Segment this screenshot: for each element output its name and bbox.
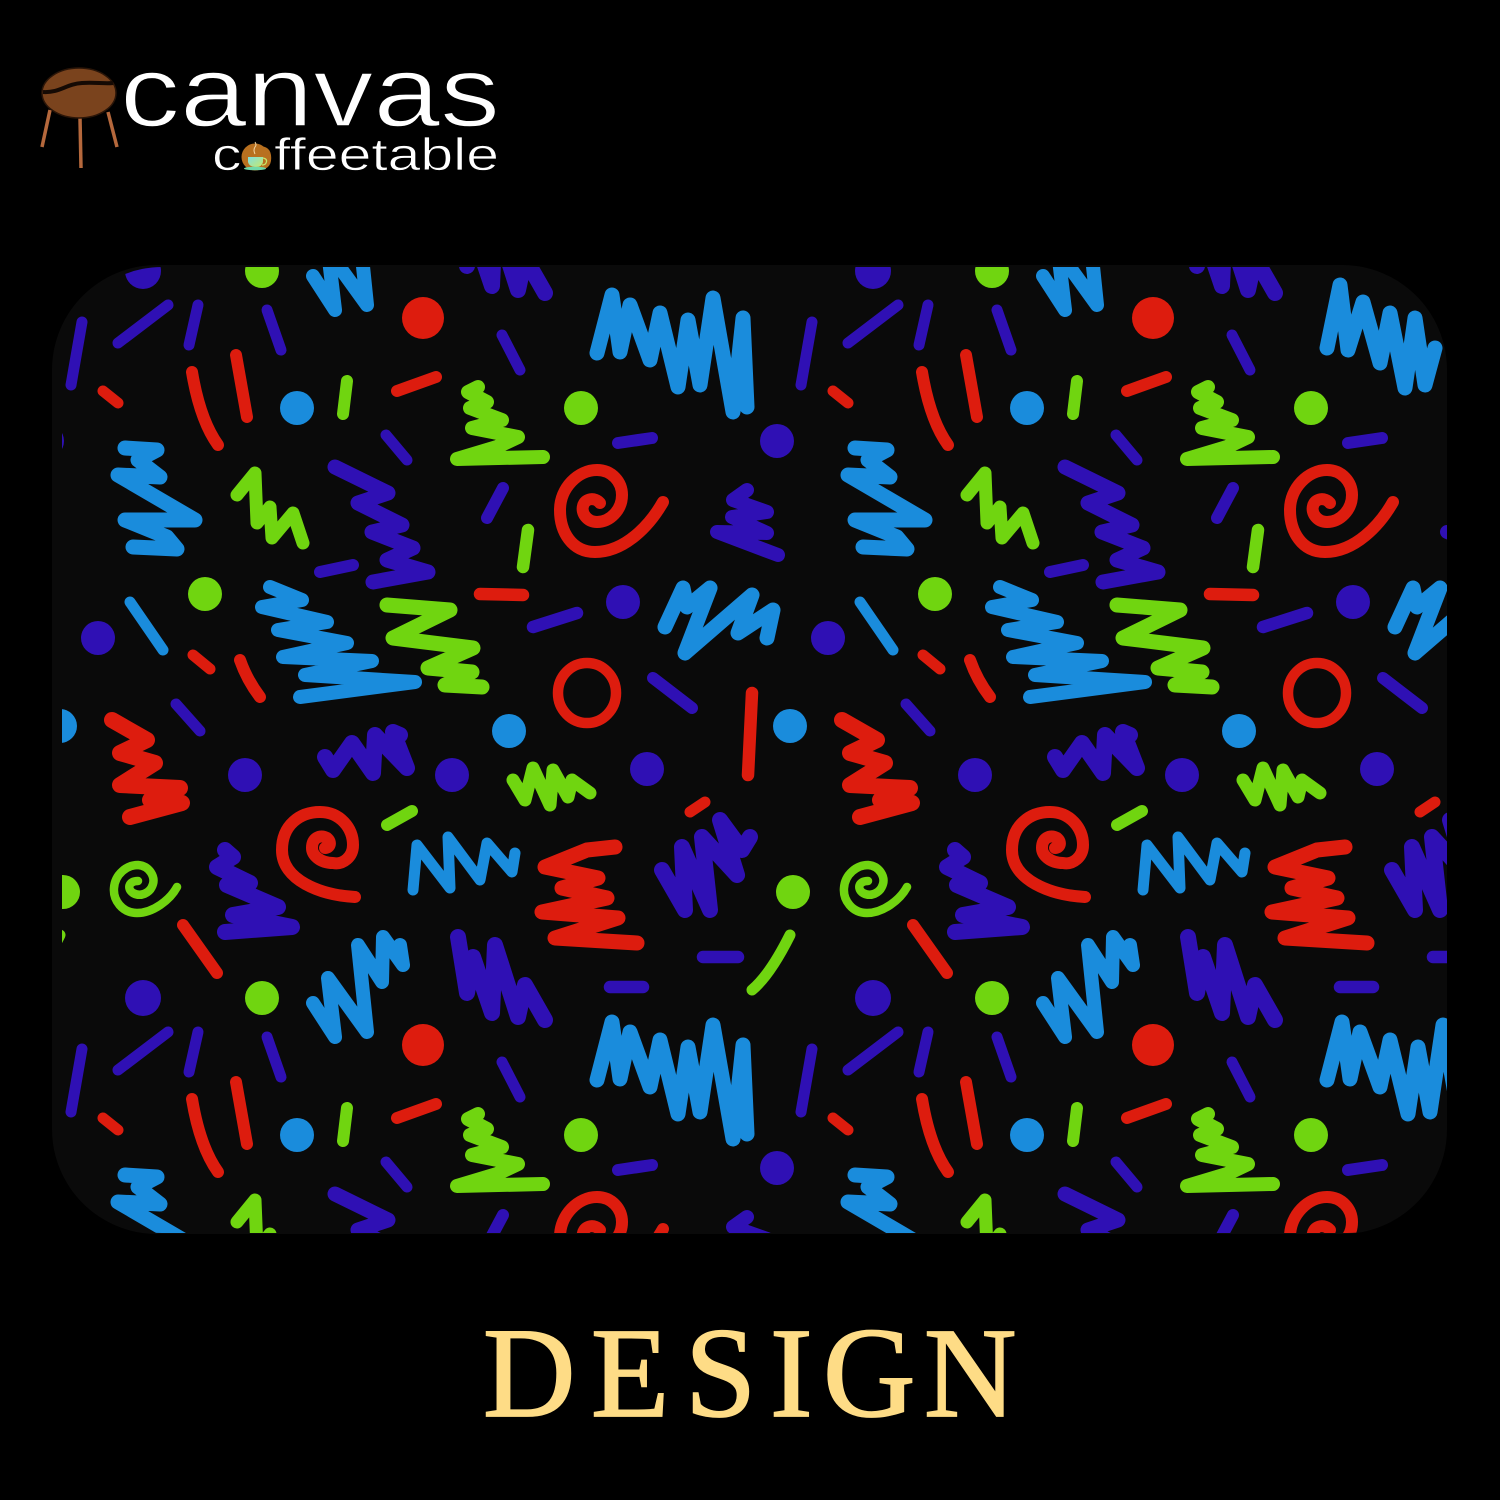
middle dashes (130, 530, 790, 990)
pattern band: upper shapes (103, 297, 812, 582)
mat pattern (62, 267, 1447, 1233)
wordmark: coffeetable: coffeetable (212, 129, 499, 180)
upper dots (280, 297, 794, 458)
middle dots (81, 577, 810, 909)
icon: coffee bean table (42, 68, 117, 168)
middle spirals and ring (114, 663, 616, 913)
middle squiggles (112, 587, 773, 943)
lower squiggles (313, 937, 545, 1037)
repeated pattern tiles (62, 267, 1447, 1233)
icon: coffee cup (242, 142, 268, 170)
title: DESIGN: DESIGN (483, 1302, 1016, 1444)
upper spiral (560, 470, 663, 552)
pattern band: middle shapes (81, 530, 810, 990)
upper squiggles (118, 387, 778, 582)
mat base (52, 265, 1447, 1234)
pattern band: lower shapes (125, 937, 545, 1037)
lower dots (125, 980, 279, 1016)
upper dashes (103, 305, 812, 518)
wordmark: canvas: canvas (120, 36, 500, 148)
panel: patterned mat (52, 265, 1447, 1234)
logo: canvas coffeetable (42, 36, 500, 180)
large blue squiggle (597, 285, 1477, 1139)
